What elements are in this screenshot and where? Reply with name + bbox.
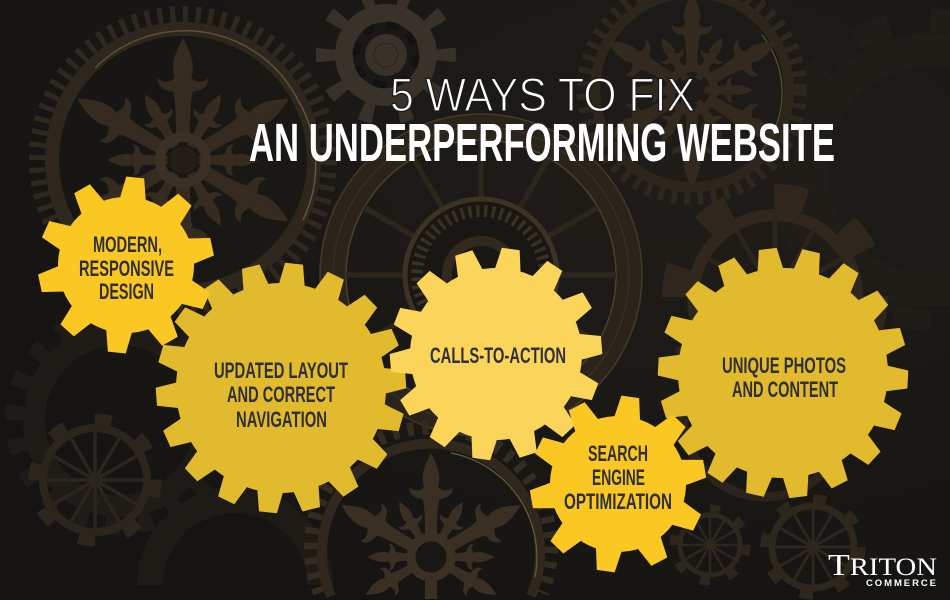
gear: search engine optimization: OPTIMIZATION [564,489,672,514]
logo: Triton Commerce: COMMERCE [866,578,936,589]
dim background gear: left [14,314,226,526]
spoked gear: top center [328,0,444,113]
gear: modern responsive design: DESIGN [99,279,154,304]
spoked wheel: bottom right small [674,509,746,581]
ornate gear: bottom center [311,427,551,600]
ornate gear: top right [584,0,800,198]
dim background gear: below right gear [683,333,847,497]
gear: updated layout: AND CORRECT [227,382,335,407]
gear: modern responsive design: MODERN, [93,232,162,257]
title [249,68,835,173]
block-tooth gear: behind right gear [675,197,875,397]
spoked wheel: bottom left [35,420,155,540]
gear: updated layout: NAVIGATION [236,407,327,432]
gear: search engine optimization: ENGINE [592,465,645,490]
dim background gear: far right [780,20,950,320]
gear: modern responsive design [30,168,222,362]
gear: updated layout [143,251,419,525]
gear: unique photos: UNIQUE PHOTOS [722,353,846,378]
gear: search engine optimization: SEARCH [588,441,648,466]
dim background gear: lower left [150,500,320,585]
gear: calls to action: CALLS-TO-ACTION [430,343,566,368]
title line 1: 5 WAYS TO FIX [390,68,695,121]
gear: unique photos [633,223,933,523]
gear: calls to action [376,234,616,474]
gear: search engine optimization [519,385,717,583]
gear: unique photos: AND CONTENT [732,377,838,402]
large wheel: center [320,114,642,436]
spoked wheel: bottom right large [766,500,860,594]
gear: modern responsive design: RESPONSIVE [79,256,174,281]
logo: Triton Commerce: TRITON [828,547,937,582]
ornate gear: upper left [37,14,329,306]
gear: updated layout: UPDATED LAYOUT [214,358,348,383]
